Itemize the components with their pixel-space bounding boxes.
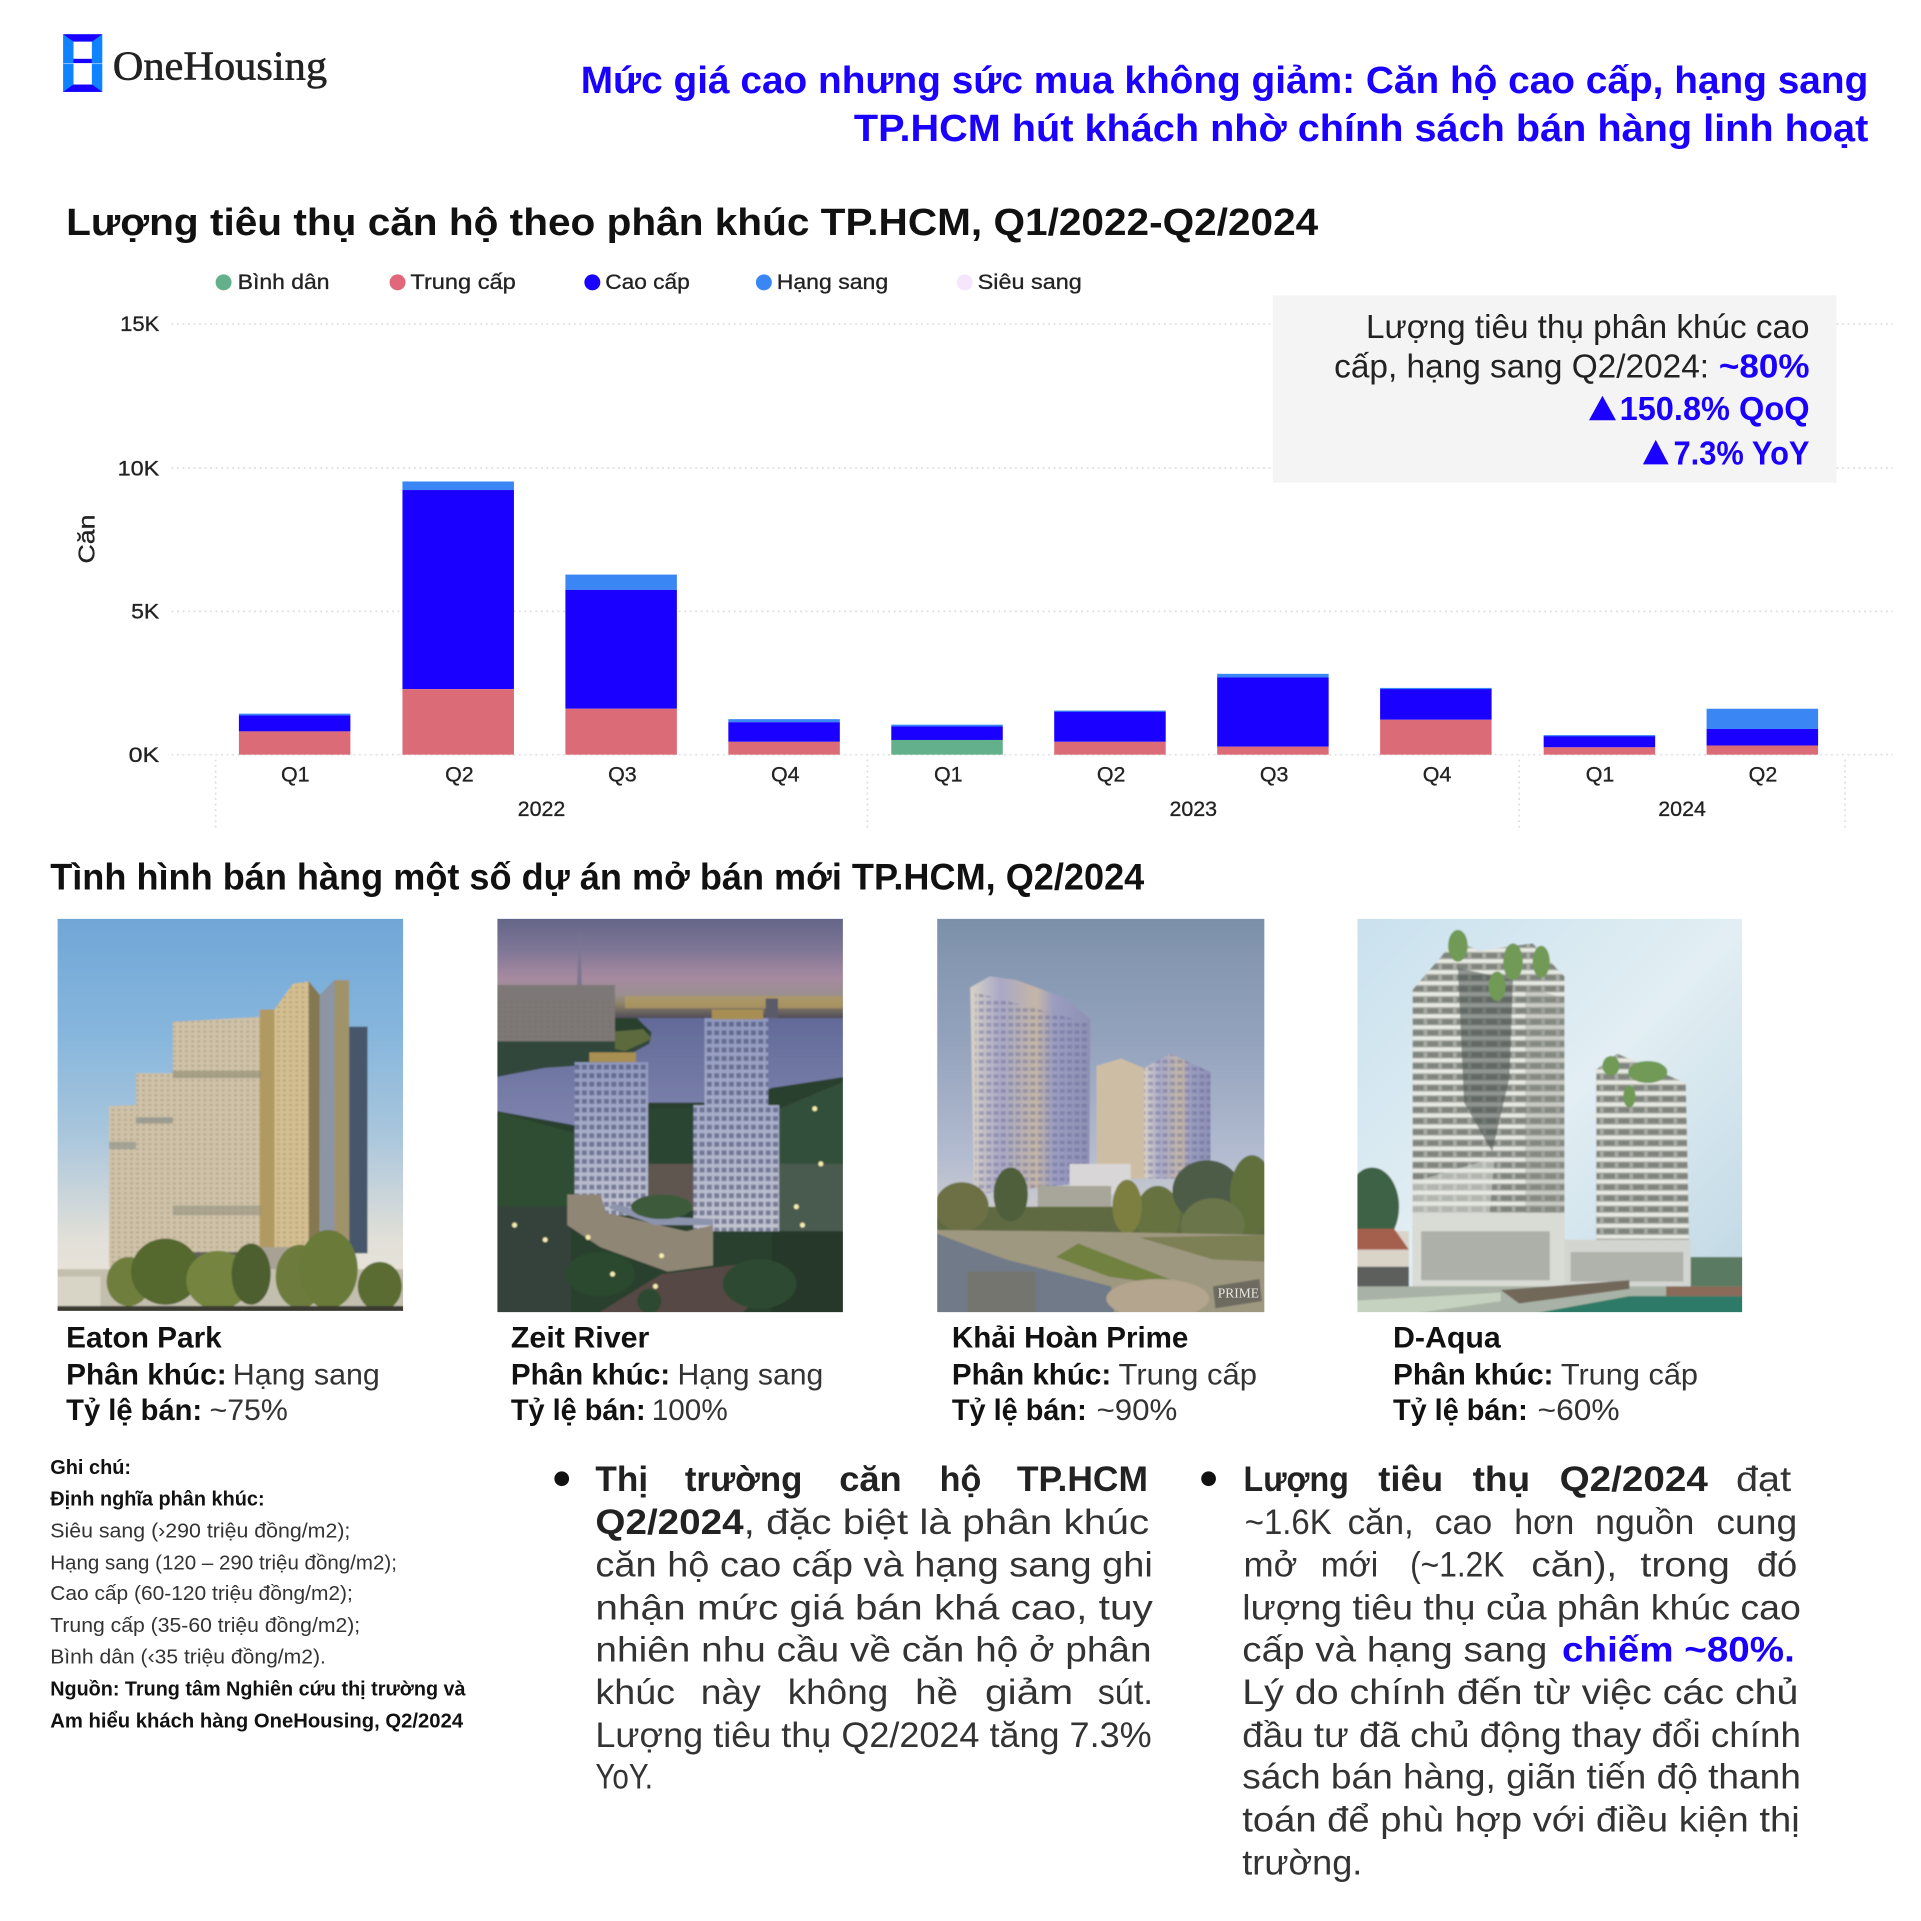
text block: market commentary: nhiên nhu cầu về căn hộ ở phân <box>595 1629 1152 1669</box>
legend: Cao cấp <box>605 270 690 294</box>
logo wordmark: OneHousing <box>113 44 327 90</box>
callout: sales share <box>1273 295 1836 483</box>
caption: Eaton Park: Eaton Park <box>66 1322 222 1355</box>
caption: D-Aqua: Tỷ lệ bán: <box>1393 1394 1528 1427</box>
caption: Zeit River: Tỷ lệ bán: <box>511 1394 646 1427</box>
y axis labels <box>73 312 160 767</box>
text block: sales commentary: Q2/2024 <box>1560 1459 1708 1499</box>
text block: sales commentary: cao <box>1435 1502 1492 1542</box>
stacked bar chart <box>73 270 1893 831</box>
notes and source: Định nghĩa phân khúc: <box>50 1489 265 1511</box>
text block: market commentary: YoY. <box>595 1757 653 1797</box>
caption: Zeit River: Zeit River <box>511 1322 650 1355</box>
callout: sales share: ~80% <box>1719 348 1810 385</box>
x axis labels: Q3 <box>608 763 637 787</box>
notes and source: Bình dân (‹35 triệu đồng/m2). <box>50 1647 326 1669</box>
x axis labels <box>281 763 1777 821</box>
text block: sales commentary: (~1.2K <box>1410 1545 1505 1585</box>
x axis labels: Q4 <box>1423 763 1451 787</box>
caption: Zeit River: Phân khúc: <box>511 1358 670 1391</box>
caption: Zeit River: 100% <box>652 1394 728 1427</box>
caption: Zeit River <box>511 1322 823 1427</box>
x axis labels: Q2 <box>1097 763 1125 787</box>
y axis labels: 15K <box>120 312 160 336</box>
legend: Trung cấp <box>410 270 516 294</box>
text block: market commentary: , đặc biệt là phân khúc <box>744 1502 1149 1542</box>
x axis labels: 2024 <box>1658 797 1706 821</box>
callout: sales share: cấp, hạng sang Q2/2024: <box>1334 348 1709 385</box>
notes and source: Siêu sang (›290 triệu đồng/m2); <box>50 1521 350 1543</box>
caption: Eaton Park <box>66 1322 380 1427</box>
x axis labels: Q1 <box>1586 763 1614 787</box>
y axis labels: 0K <box>129 743 160 767</box>
main title <box>581 60 1869 150</box>
text block: market commentary: hề <box>915 1672 958 1712</box>
text block: market commentary: Q2/2024 <box>595 1502 744 1542</box>
chart heading: Lượng tiêu thụ căn hộ theo phân khúc TP.HCM, Q1/2022-Q2/2024 <box>66 202 1318 244</box>
text block: sales commentary: cung <box>1716 1502 1797 1542</box>
text block: market commentary: nhận mức giá bán khá cao, tuy <box>595 1588 1153 1628</box>
caption: Khải Hoàn Prime: ~90% <box>1096 1394 1177 1427</box>
x axis labels: Q1 <box>934 763 963 787</box>
notes and source <box>50 1457 466 1732</box>
notes and source: Cao cấp (60-120 triệu đồng/m2); <box>50 1583 353 1605</box>
caption: D-Aqua: Phân khúc: <box>1393 1358 1553 1391</box>
logo: OneHousing <box>63 34 327 92</box>
text block: sales commentary: hơn <box>1514 1502 1574 1542</box>
caption: Khải Hoàn Prime: Khải Hoàn Prime <box>952 1322 1188 1355</box>
caption: Eaton Park: Phân khúc: <box>66 1358 227 1391</box>
projects heading: Tình hình bán hàng một số dự án mở bán mới TP.HCM, Q2/2024 <box>50 856 1145 897</box>
text block: market commentary: căn <box>839 1459 902 1499</box>
callout: sales share: Lượng tiêu thụ phân khúc cao <box>1366 309 1810 346</box>
legend <box>216 270 1082 294</box>
notes and source: Am hiểu khách hàng OneHousing, Q2/2024 <box>50 1710 464 1732</box>
notes and source: Hạng sang (120 – 290 triệu đồng/m2); <box>50 1552 397 1574</box>
text block: market commentary: trường <box>685 1459 802 1499</box>
caption: D-Aqua: Trung cấp <box>1561 1358 1698 1391</box>
text block: sales commentary: đó <box>1757 1545 1797 1585</box>
caption: Eaton Park: ~75% <box>209 1394 288 1427</box>
text block: market commentary <box>554 1459 1153 1797</box>
x axis labels: Q1 <box>281 763 310 787</box>
text block: sales commentary: chiếm ~80%. <box>1562 1629 1795 1669</box>
caption: Khải Hoàn Prime <box>952 1322 1257 1427</box>
legend: Bình dân <box>238 270 330 294</box>
main title: TP.HCM hút khách nhờ chính sách bán hàng linh hoạt <box>854 108 1869 150</box>
x axis labels: Q2 <box>445 763 474 787</box>
text block: market commentary: Lượng tiêu thụ Q2/2024 tăng 7.3% <box>595 1715 1152 1755</box>
text block: market commentary: sút. <box>1098 1672 1153 1712</box>
caption: D-Aqua <box>1393 1322 1698 1427</box>
sign text: PRIME: PRIME <box>1218 1285 1259 1300</box>
text block: sales commentary: mở <box>1244 1545 1297 1585</box>
text block: sales commentary: lượng tiêu thụ của phân khúc cao <box>1242 1588 1801 1628</box>
x axis labels: 2023 <box>1169 797 1217 821</box>
text block: sales commentary: cấp và hạng sang <box>1242 1629 1547 1669</box>
text block: sales commentary: toán để phù hợp với điều kiện thị <box>1242 1800 1800 1840</box>
text block: market commentary: không <box>788 1672 888 1712</box>
caption: Khải Hoàn Prime: Phân khúc: <box>952 1358 1111 1391</box>
x axis labels: Q4 <box>771 763 800 787</box>
image: Zeit River <box>490 913 853 1319</box>
text block: sales commentary: trong <box>1640 1545 1730 1585</box>
notes and source: Ghi chú: <box>50 1457 131 1479</box>
text block: sales commentary: nguồn <box>1595 1502 1694 1542</box>
caption: D-Aqua: D-Aqua <box>1393 1322 1501 1355</box>
y axis labels: 5K <box>131 600 160 624</box>
callout: sales share: 150.8% QoQ <box>1620 391 1810 428</box>
caption: Zeit River: Hạng sang <box>677 1358 823 1391</box>
text block: sales commentary: trường. <box>1242 1842 1362 1882</box>
text block: sales commentary: đầu tư đã chủ động thay đổi chính <box>1242 1715 1801 1755</box>
text block: market commentary: hộ <box>940 1459 981 1499</box>
text block: sales commentary: đạt <box>1736 1459 1791 1499</box>
text block: market commentary: này <box>701 1672 761 1712</box>
notes and source: Trung cấp (35-60 triệu đồng/m2); <box>50 1615 360 1637</box>
caption: Khải Hoàn Prime: Trung cấp <box>1119 1358 1257 1391</box>
text block: sales commentary: thụ <box>1473 1459 1530 1499</box>
image: Eaton Park <box>49 913 412 1318</box>
text block: sales commentary <box>1201 1459 1801 1882</box>
text block: market commentary: TP.HCM <box>1017 1459 1148 1499</box>
x axis labels: Q3 <box>1260 763 1288 787</box>
x axis labels: 2022 <box>518 797 565 821</box>
text block: sales commentary: căn), <box>1531 1545 1617 1585</box>
y axis labels: Căn <box>73 515 99 564</box>
notes and source: Nguồn: Trung tâm Nghiên cứu thị trường và <box>50 1679 466 1701</box>
caption: Eaton Park: Hạng sang <box>233 1358 380 1391</box>
bars <box>239 481 1818 755</box>
callout: sales share: 7.3% YoY <box>1674 435 1810 472</box>
image: Khải Hoàn Prime <box>931 913 1274 1319</box>
text block: sales commentary: tiêu <box>1378 1459 1443 1499</box>
text block: sales commentary: mới <box>1321 1545 1378 1585</box>
text block: sales commentary: căn, <box>1348 1502 1414 1542</box>
text block: sales commentary: Lượng <box>1244 1459 1349 1499</box>
caption: Khải Hoàn Prime: Tỷ lệ bán: <box>952 1394 1087 1427</box>
text block: sales commentary: sách bán hàng, giãn tiến độ thanh <box>1242 1757 1801 1797</box>
y axis labels: 10K <box>118 456 160 480</box>
text block: sales commentary: Lý do chính đến từ việc các chủ <box>1242 1672 1798 1712</box>
text block: market commentary: Thị <box>595 1459 648 1499</box>
text block: market commentary: khúc <box>595 1672 675 1712</box>
image: D-Aqua <box>1345 913 1752 1319</box>
main title: Mức giá cao nhưng sức mua không giảm: Căn hộ cao cấp, hạng sang <box>581 60 1868 102</box>
x axis labels: Q2 <box>1749 763 1777 787</box>
legend: Siêu sang <box>978 270 1082 294</box>
text block: market commentary: căn hộ cao cấp và hạng sang ghi <box>595 1545 1153 1585</box>
caption: Eaton Park: Tỷ lệ bán: <box>66 1394 202 1427</box>
text block: market commentary: giảm <box>985 1672 1073 1712</box>
legend: Hạng sang <box>777 270 888 294</box>
text block: sales commentary: ~1.6K <box>1245 1502 1332 1542</box>
caption: D-Aqua: ~60% <box>1538 1394 1620 1427</box>
icon: logo mark <box>63 34 102 92</box>
